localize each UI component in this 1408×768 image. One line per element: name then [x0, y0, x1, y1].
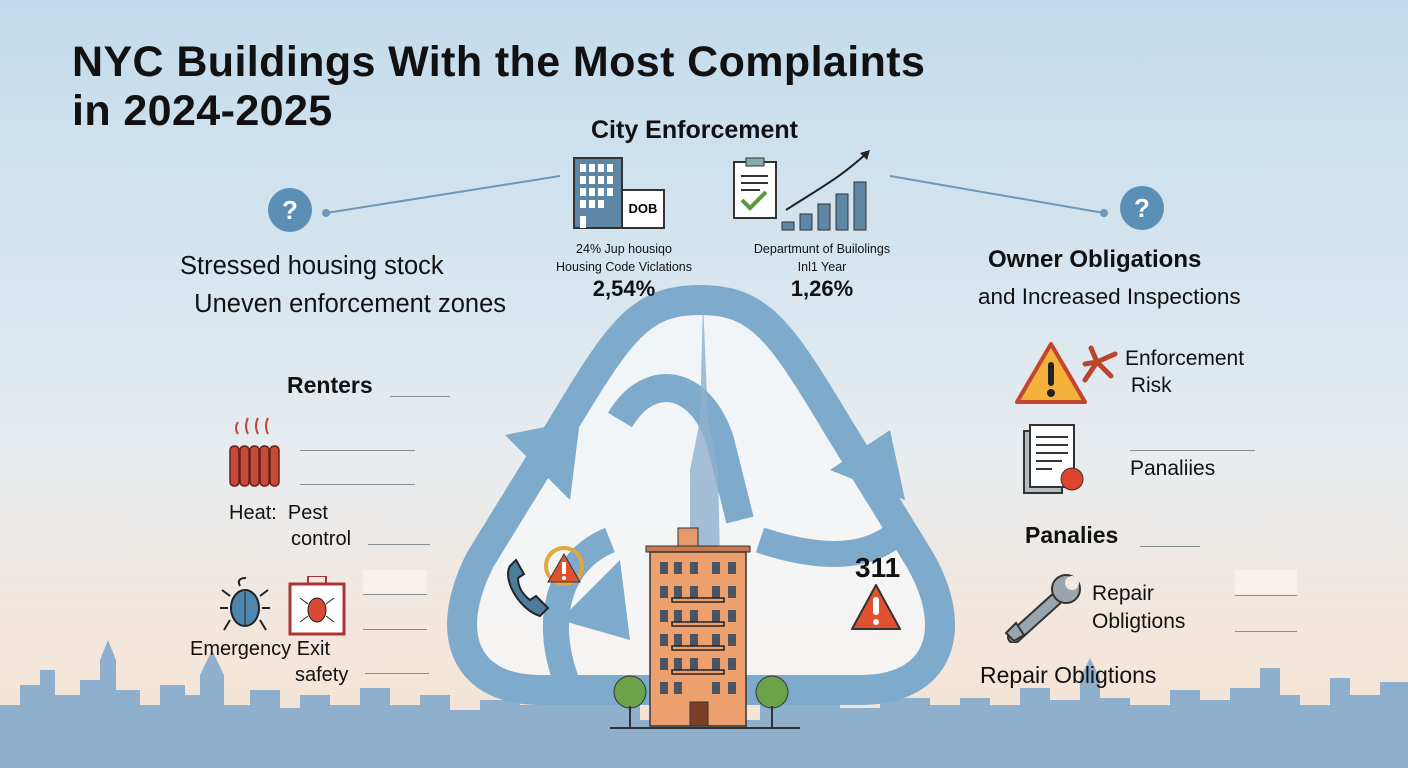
text: 311: 311: [855, 552, 900, 583]
icon: penalty document: [1023, 424, 1084, 494]
icon: DOB building: [573, 157, 665, 229]
text block: left context: Uneven enforcement zones: [194, 290, 506, 318]
icon: wrench: [1004, 574, 1081, 643]
text block: left context: Stressed housing stock: [180, 252, 444, 280]
title: NYC Buildings With the Most Complaints: [72, 38, 925, 86]
spire: [690, 300, 720, 560]
text: enforcement risk: [1125, 347, 1244, 397]
stat: department of buildings: Departmunt of Builolings: [754, 242, 890, 256]
heading: City Enforcement: City Enforcement: [591, 116, 798, 144]
icon: question left: ?: [282, 195, 298, 225]
icon: radiator: [229, 418, 280, 487]
text: heat pest control: control: [291, 528, 351, 550]
text: and Increased Inspections: [978, 284, 1241, 309]
icon: DOB building: DOB: [629, 201, 657, 216]
icon: warning triangle: [1015, 342, 1118, 404]
stat: housing code violations: [556, 242, 692, 301]
text: enforcement risk: Enforcement: [1125, 347, 1244, 370]
text: heat pest control: [229, 502, 351, 550]
stat: housing code violations: 24% Jup housiqo: [576, 242, 672, 256]
cycle arrows: [462, 300, 940, 690]
text: repair obligtions: [1092, 582, 1185, 633]
icon: question right: ?: [1134, 193, 1150, 223]
text: repair obligtions bottom: Repair Obligtions: [980, 662, 1156, 688]
text: panaliies: Panaliies: [1130, 457, 1215, 480]
title: [72, 38, 925, 135]
heading: panalies: Panalies: [1025, 522, 1118, 548]
heading: Owner Obligations: Owner Obligations: [988, 246, 1201, 273]
heading: Renters: Renters: [287, 372, 373, 398]
icon: question left: [268, 188, 312, 232]
icon: question right: [1120, 186, 1164, 230]
icon: clipboard and bar chart: [733, 150, 870, 230]
icon: pest box: [288, 576, 346, 636]
icon: phone alert: [507, 546, 584, 618]
title: in 2024-2025: [72, 87, 333, 135]
panel: owner risks: [1004, 342, 1297, 643]
stat: housing code violations: 2,54%: [593, 276, 655, 301]
text: repair obligtions: Obligtions: [1092, 610, 1185, 633]
text: emergency exit safety: safety: [295, 664, 348, 686]
text block: left context: [180, 252, 506, 318]
panel: renters: [190, 372, 450, 686]
text: emergency exit safety: [190, 638, 348, 686]
icon: 311 warning: [851, 584, 901, 630]
icon: beetle: [220, 577, 270, 630]
stat: department of buildings: Inl1 Year: [798, 260, 846, 274]
text: heat pest control: Heat: Pest: [229, 502, 328, 524]
stat: housing code violations: Housing Code Viclations: [556, 260, 692, 274]
icon: apartment building: [610, 528, 800, 729]
text: enforcement risk: Risk: [1131, 374, 1172, 397]
stat: department of buildings: 1,26%: [791, 276, 853, 301]
text: emergency exit safety: Emergency Exit: [190, 638, 330, 660]
skyline: [0, 640, 1408, 768]
stat: department of buildings: [754, 242, 890, 301]
connector lines: [326, 176, 560, 213]
text: repair obligtions: Repair: [1092, 582, 1154, 605]
